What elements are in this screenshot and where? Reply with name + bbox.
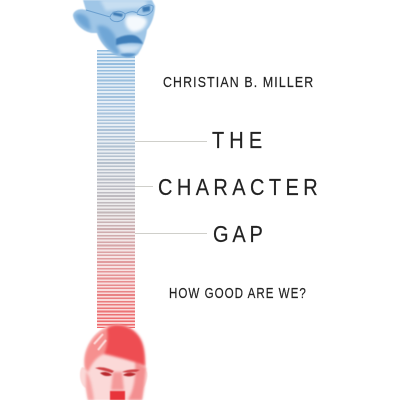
connector line: character bbox=[135, 186, 153, 187]
title word: THE: THE bbox=[212, 127, 267, 153]
connector line: the bbox=[135, 140, 207, 142]
gradient striped bar bbox=[97, 50, 135, 328]
author name: CHRISTIAN B. MILLER bbox=[163, 75, 314, 91]
portrait: blue face at top bbox=[72, 0, 156, 58]
portrait: red face at bottom bbox=[80, 323, 148, 400]
title word: GAP: GAP bbox=[213, 221, 267, 247]
connector line: gap bbox=[135, 232, 207, 234]
title word: CHARACTER: CHARACTER bbox=[158, 174, 322, 200]
subtitle: HOW GOOD ARE WE? bbox=[169, 286, 307, 302]
